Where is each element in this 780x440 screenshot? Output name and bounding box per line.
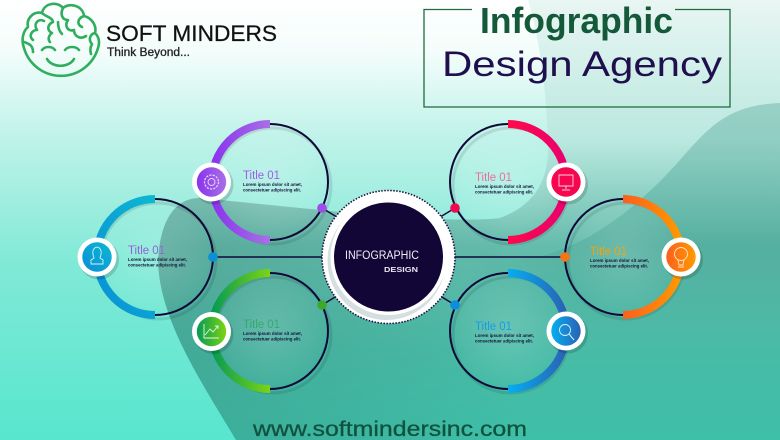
icon: magnifier bbox=[546, 312, 588, 354]
center badge bbox=[322, 190, 455, 324]
icon: monitor bbox=[546, 162, 588, 204]
icon: gear bbox=[192, 162, 234, 204]
center sublabel: DESIGN bbox=[384, 265, 418, 274]
item title: Title 01 bbox=[475, 321, 512, 333]
item text: consectetuer adipiscing elit. bbox=[475, 338, 533, 344]
panel: cyan item bbox=[78, 199, 218, 319]
connectors bbox=[213, 208, 565, 305]
item text: consectetuer adipiscing elit. bbox=[475, 190, 533, 194]
connector dot bbox=[208, 252, 218, 262]
panel: red item bbox=[450, 124, 588, 244]
item title: Title 01 bbox=[128, 245, 165, 257]
item title: Title 01 bbox=[590, 246, 627, 258]
panel: orange item bbox=[560, 199, 703, 319]
panel: purple item bbox=[192, 124, 331, 244]
item text: Lorem ipsum dolor sit amet, bbox=[475, 184, 534, 189]
connector dot bbox=[317, 300, 327, 310]
heading: Infographic: Infographic bbox=[480, 0, 673, 41]
connector dot bbox=[450, 203, 460, 213]
item text: consectetuer adipiscing elit. bbox=[590, 264, 648, 268]
heading: Design Agency: Design Agency bbox=[442, 45, 723, 84]
item title: Title 01 bbox=[243, 319, 280, 331]
logo bbox=[23, 4, 277, 76]
title box bbox=[424, 0, 730, 107]
connector dot bbox=[450, 300, 460, 310]
center label: INFOGRAPHIC bbox=[345, 250, 419, 262]
item text: consectetuer adipiscing elit. bbox=[243, 188, 301, 192]
logo name: SOFT MINDERS bbox=[106, 21, 277, 46]
item title: Title 01 bbox=[243, 170, 280, 182]
item text: Lorem ipsum dolor sit amet, bbox=[243, 182, 302, 187]
item text: consectetuer adipiscing elit. bbox=[243, 336, 301, 342]
icon: person bbox=[78, 238, 119, 280]
panel: green item bbox=[192, 273, 331, 393]
connector dot bbox=[560, 252, 570, 262]
item text: Lorem ipsum dolor sit amet, bbox=[243, 331, 302, 336]
icon: light bulb bbox=[662, 238, 703, 280]
item title: Title 01 bbox=[475, 172, 512, 184]
item text: consectetuer adipiscing elit. bbox=[128, 262, 186, 268]
item text: Lorem ipsum dolor sit amet, bbox=[128, 257, 187, 262]
connector dot bbox=[317, 203, 327, 213]
logo tagline: Think Beyond... bbox=[107, 47, 190, 59]
item text: Lorem ipsum dolor sit amet, bbox=[590, 258, 649, 263]
panel: blue item bbox=[450, 273, 588, 393]
icon: smiling brain head logo bbox=[23, 4, 99, 76]
item text: Lorem ipsum dolor sit amet, bbox=[475, 333, 534, 338]
icon: chart bbox=[192, 312, 234, 354]
